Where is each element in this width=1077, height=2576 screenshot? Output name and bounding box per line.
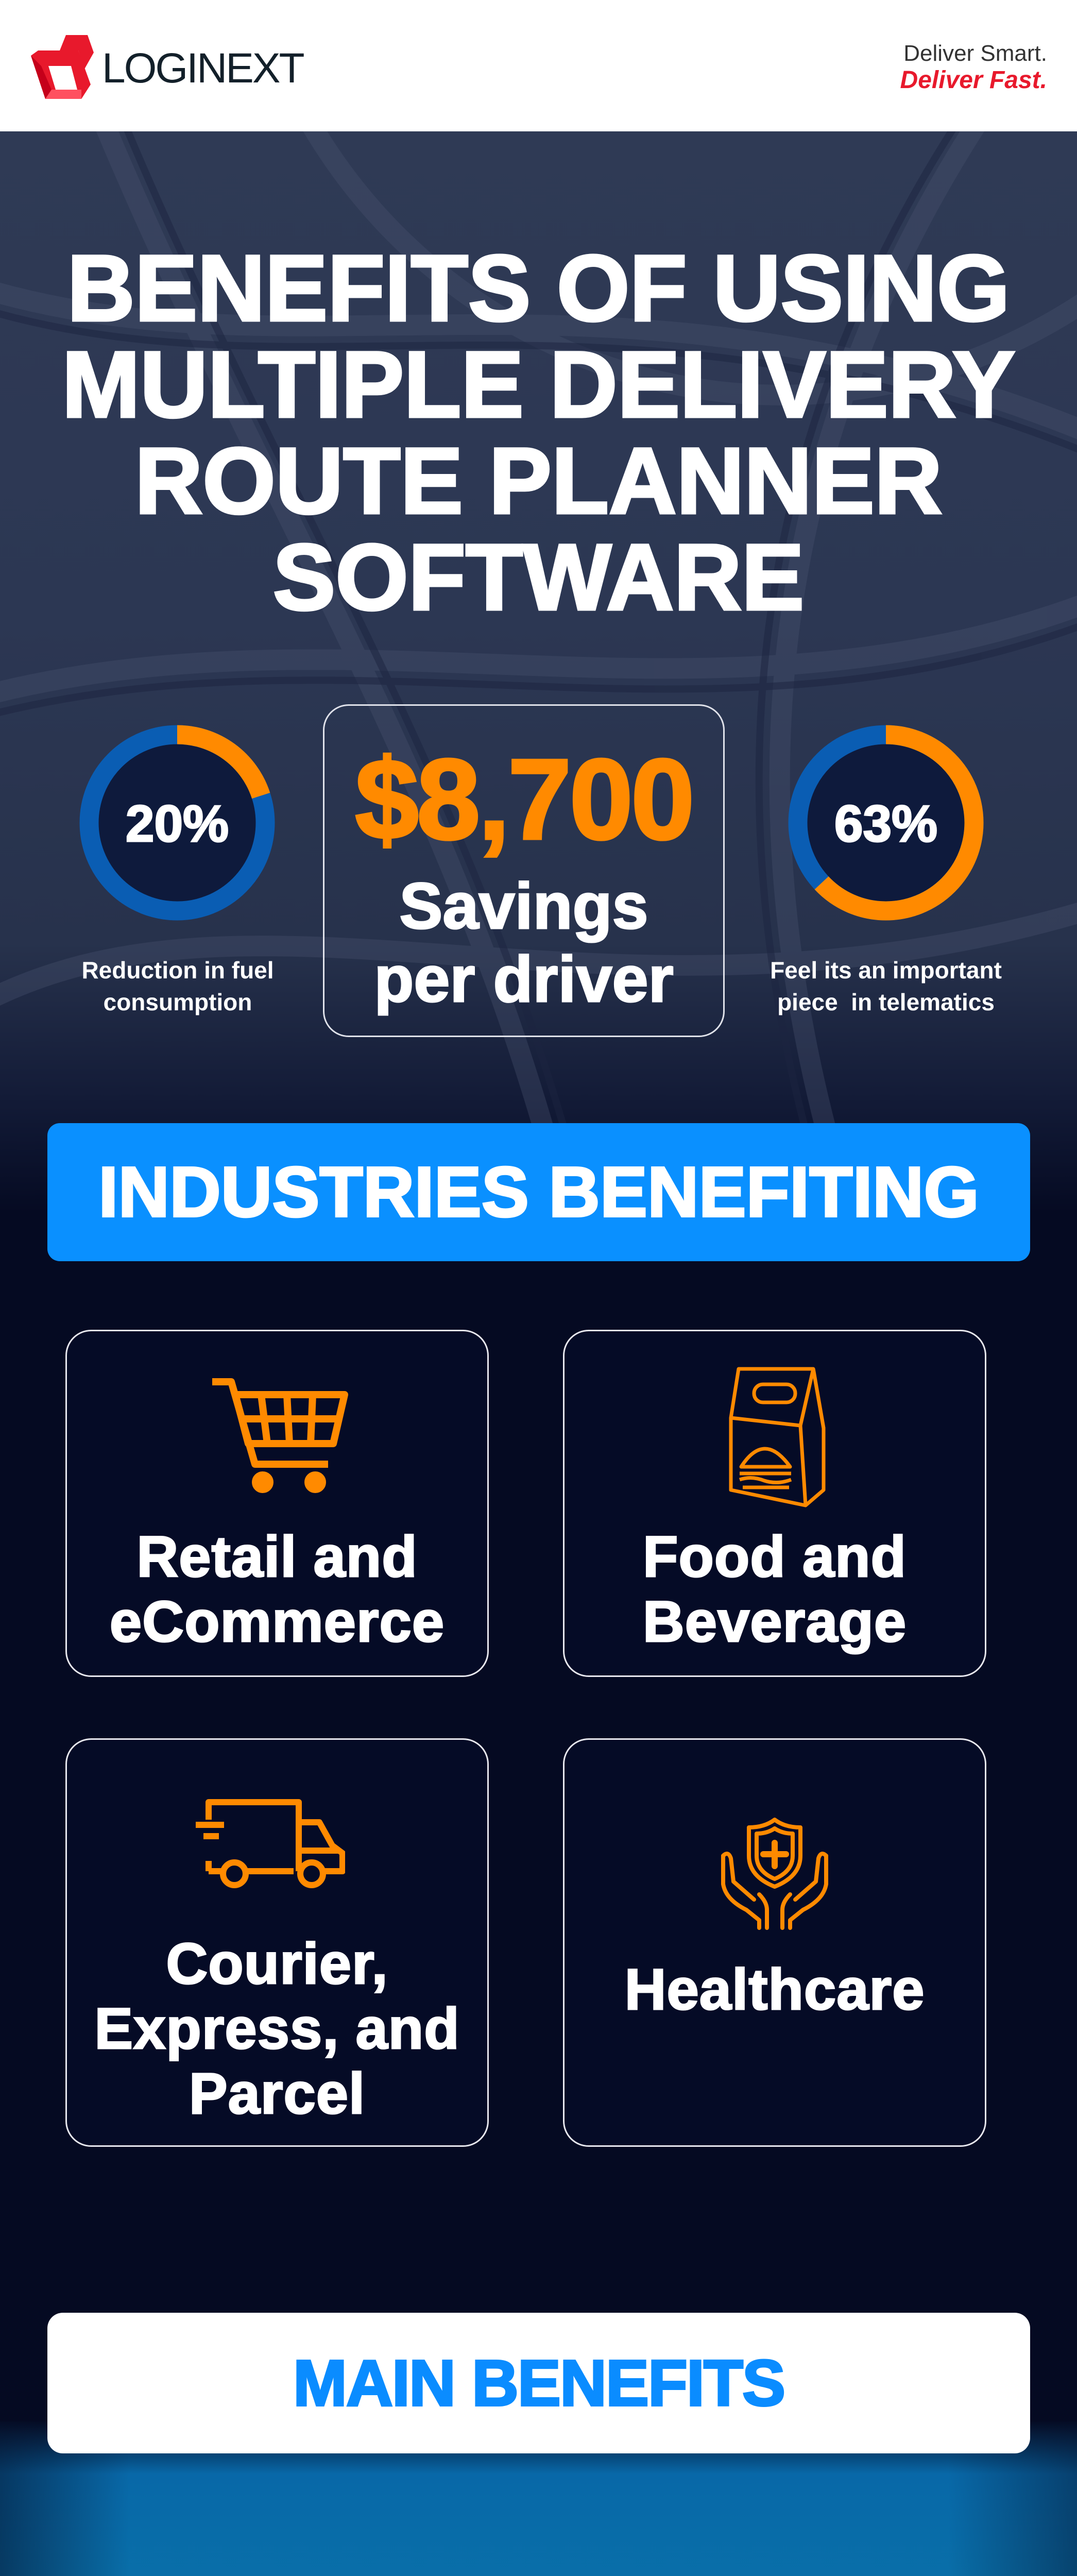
- stat: 20% ring: [79, 725, 275, 1015]
- stat label: Feel its an important: [770, 957, 1002, 984]
- icon: truck: [196, 1799, 345, 1888]
- stat label: [770, 957, 1002, 1015]
- logo: [31, 35, 304, 99]
- card: healthcare: [563, 1738, 986, 2147]
- card text: Healthcare: [625, 1957, 925, 2022]
- title: BENEFITS OF USING: [67, 235, 1010, 341]
- card: courier: [65, 1738, 489, 2147]
- stat: savings box: $8,700: [355, 736, 692, 863]
- stat: 20% ring: 20%: [126, 795, 229, 853]
- stat label: piece in telematics: [777, 989, 995, 1015]
- stat label: [81, 957, 274, 1015]
- industries header: INDUSTRIES BENEFITING: [98, 1153, 979, 1232]
- card text: Express, and: [94, 1996, 460, 2061]
- main benefits header: MAIN BENEFITS: [293, 2347, 784, 2419]
- tagline: Deliver Smart.: [903, 41, 1047, 66]
- card text: [110, 1524, 445, 1654]
- industries header: [47, 1123, 1030, 1261]
- header bar: [0, 0, 1077, 131]
- stat: savings box: [323, 704, 725, 1037]
- stat label: Reduction in fuel: [81, 957, 274, 984]
- card text: eCommerce: [110, 1589, 445, 1654]
- tagline: [900, 41, 1047, 94]
- card text: [94, 1931, 460, 2126]
- card text: Courier,: [166, 1931, 388, 1996]
- title: MULTIPLE DELIVERY: [62, 332, 1015, 437]
- title: [62, 235, 1016, 630]
- stat: savings box: per driver: [374, 943, 674, 1015]
- card text: Parcel: [189, 2061, 365, 2126]
- card text: [643, 1524, 907, 1655]
- stat label: consumption: [104, 989, 252, 1015]
- main benefits header: [47, 2313, 1030, 2453]
- card: retail: [65, 1330, 489, 1677]
- tagline: Deliver Fast.: [900, 66, 1047, 94]
- icon: healthcare hands shield: [721, 1818, 828, 1930]
- hero background: [0, 131, 1077, 1213]
- main benefits background panel: [0, 2421, 1077, 2576]
- card text: Retail and: [136, 1524, 418, 1589]
- title: SOFTWARE: [273, 524, 804, 630]
- stat: 63% ring: 63%: [834, 795, 937, 853]
- card: food: [563, 1330, 986, 1677]
- card text: Beverage: [643, 1589, 907, 1654]
- stat: savings box: Savings: [399, 870, 648, 942]
- card text: Food and: [643, 1524, 907, 1589]
- stat: 63% ring: [770, 725, 1002, 1015]
- icon: food bag: [729, 1367, 825, 1507]
- icon: cart: [212, 1378, 348, 1493]
- title: ROUTE PLANNER: [135, 428, 942, 533]
- logo text: LOGINEXT: [102, 45, 303, 92]
- icon: loginext mark: [31, 35, 94, 99]
